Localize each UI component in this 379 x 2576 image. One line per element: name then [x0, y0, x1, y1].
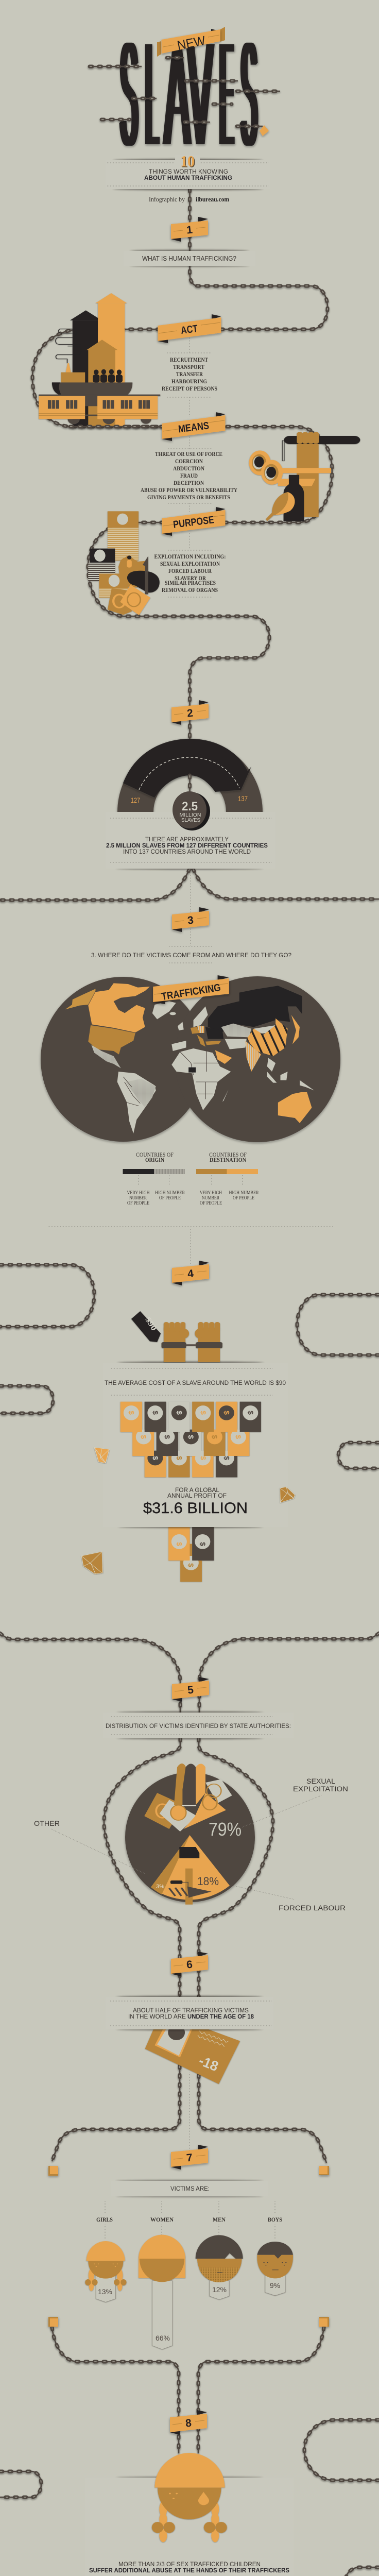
legend: countries of destination [196, 1152, 259, 1206]
dollar signs: $ [199, 1542, 207, 1546]
text: more than 2/3 [89, 2562, 289, 2574]
list: purpose: REMOVAL OF ORGANS [162, 587, 218, 594]
dollar signs: $ [175, 1542, 183, 1546]
ribbon: means [162, 412, 226, 441]
list: act: TRANSPORT [173, 364, 204, 370]
legend: countries of origin: HIGH NUMBER [155, 1191, 185, 1196]
boy [257, 2242, 293, 2278]
ribbon 4: 4 [187, 1267, 194, 1280]
percentage values [98, 2281, 280, 2342]
credit line: ilbureau.com [196, 196, 230, 203]
illustration: shackled hands with price tag: $90 [143, 1316, 158, 1332]
illustration: ship and train (act) [39, 293, 160, 427]
band: 2.5 million slaves text [106, 812, 275, 870]
text: more than 2/3: MORE THAN 2/3 OF SEX TRAFFICKED CHILDREN [118, 2562, 261, 2568]
text: about half under 18: IN THE WORLD ARE [128, 2014, 186, 2020]
legend: countries of origin: OF PEOPLE [159, 1196, 181, 1201]
illustration: crying girl [152, 2453, 227, 2542]
label: forced labour: FORCED LABOUR [279, 1904, 346, 1912]
list: purpose [154, 550, 226, 597]
list: means: FRAUD [180, 473, 198, 479]
percentage values: 9% [270, 2281, 280, 2290]
column labels: GIRLS [96, 2217, 113, 2223]
legend: countries of destination: NUMBER [202, 1196, 220, 1201]
band: sex trafficked children [85, 2477, 294, 2576]
credit line: Infographic by [149, 196, 185, 203]
percentage values: 12% [212, 2285, 227, 2294]
banknote stack [120, 1402, 261, 1567]
man [196, 2235, 243, 2282]
ribbon: act: ACT [180, 323, 198, 336]
legend: countries of destination: DESTINATION [210, 1157, 247, 1163]
percentage values: 66% [156, 2334, 170, 2342]
weight: 2.5 million slaves [173, 791, 210, 831]
legend: countries of destination: OF PEOPLE [233, 1196, 254, 1201]
title lettering: SLAVES [120, 9, 257, 179]
heading block: 10 things worth knowing [107, 152, 268, 186]
upper chain segments drawn over artwork [70, 58, 280, 2576]
list: purpose: SEXUAL EXPLOITATION [160, 561, 220, 567]
weight: 2.5 million slaves: SLAVES [181, 817, 200, 823]
dollar signs: $ [175, 1411, 183, 1415]
label: sexual exploitation: EXPLOITATION [293, 1785, 348, 1793]
ribbon 7: 7 [186, 2151, 193, 2164]
heading: distribution of victims: DISTRIBUTION OF VICTIMS IDENTIFIED BY STATE AUTHORITIES: [106, 1723, 291, 1730]
list: means [141, 449, 238, 503]
ribbon 2 [171, 700, 209, 725]
text: global profit: $31.6 BILLION [143, 1500, 248, 1517]
column labels [96, 2217, 282, 2223]
heading block: 10 things worth knowing: 10 [180, 152, 195, 170]
title lettering: SLAVES: S [120, 9, 137, 179]
pie chart: victim distribution: 18% [197, 1875, 219, 1888]
ribbon 2: 2 [186, 707, 194, 720]
list: means: COERCION [175, 459, 203, 465]
label: other [34, 1820, 145, 1874]
dollar signs: $ [187, 1563, 195, 1567]
band: what is human trafficking [124, 250, 255, 267]
legend: countries of destination: HIGH NUMBER [229, 1191, 259, 1196]
text: global profit [143, 1486, 248, 1517]
legend: countries of origin: COUNTRIES OF [136, 1152, 174, 1158]
faces chart: victims demographic [85, 2217, 293, 2349]
list: means: GIVING PAYMENTS OR BENEFITS [147, 495, 230, 501]
band: distribution of victims [103, 1711, 294, 1739]
ribbon: act [158, 314, 221, 343]
column labels: MEN [213, 2217, 226, 2223]
title lettering: SLAVES: S [241, 10, 257, 179]
legend: countries of origin: NUMBER [129, 1196, 147, 1201]
list: act: RECRUITMENT [170, 357, 208, 363]
dollar signs: $ [211, 1435, 219, 1439]
list: act: RECEIPT OF PERSONS [162, 386, 217, 392]
pie wedge: other [151, 1835, 190, 1894]
girl [85, 2241, 126, 2291]
text: about half under 18: UNDER THE AGE OF 18 [187, 2014, 254, 2020]
title lettering: SLAVES: L [146, 9, 158, 179]
label: sexual exploitation [242, 1777, 348, 1827]
ribbon 8: 8 [185, 2417, 192, 2430]
ID card under 18 [145, 2025, 240, 2084]
map countries [65, 983, 314, 1133]
list: purpose: SIMILAR PRACTISES [165, 580, 216, 586]
ribbon 6 [171, 1952, 208, 1976]
band: cost and profit [103, 1362, 288, 1528]
woman [139, 2235, 185, 2282]
column labels: WOMEN [150, 2217, 174, 2223]
text: approximately 2.5 million slaves: INTO 137 COUNTRIES AROUND THE WORLD [123, 849, 251, 855]
text: average cost: THE AVERAGE COST OF A SLAVE AROUND THE WORLD IS $90 [105, 1380, 286, 1386]
ribbon: trafficking [153, 975, 229, 1004]
title lettering: SLAVES: A [164, 10, 190, 179]
percentage values: 13% [98, 2287, 112, 2296]
ribbon 1: 1 [186, 224, 193, 236]
list: means: THREAT OR USE OF FORCE [155, 451, 222, 457]
dollar signs: $ [247, 1411, 255, 1415]
dollar signs: $ [199, 1456, 208, 1460]
dollar signs: $ [222, 1411, 231, 1415]
dollar signs: $ [187, 1435, 195, 1439]
text: about half under 18 [128, 2008, 254, 2020]
text: about half under 18: ABOUT HALF OF TRAFFICKING VICTIMS [133, 2008, 249, 2014]
illustration: baton, eyes, bottle (means) [249, 432, 360, 521]
legend: countries of origin: VERY HIGH [127, 1191, 150, 1196]
heading: victims are: VICTIMS ARE: [170, 2186, 210, 2192]
pie chart: victim distribution: 3% [156, 1884, 164, 1890]
list: means: ABDUCTION [173, 466, 205, 472]
title lettering: SLAVES: V [188, 10, 213, 179]
dollar signs: $ [175, 1456, 183, 1460]
pie chart: victim distribution [125, 1764, 255, 1905]
legend: countries of destination: OF PEOPLE [200, 1201, 222, 1206]
heading block: 10 things worth knowing: 10 [181, 152, 196, 171]
ribbon 3: 3 [187, 914, 194, 927]
title ribbon: NEW [157, 27, 225, 57]
band: about half under 18 [106, 1996, 273, 2030]
dollar signs: $ [163, 1435, 171, 1439]
dollar signs: $ [234, 1435, 243, 1439]
heading: where do the victims come from: 3. WHERE DO THE VICTIMS COME FROM AND WHERE DO THEY GO? [91, 952, 291, 959]
padlocks [48, 2166, 329, 2327]
ribbon 3 [172, 907, 209, 932]
label: forced labour [233, 1886, 346, 1912]
legend: countries of destination: COUNTRIES OF [209, 1152, 247, 1158]
weight: 2.5 million slaves: 2.5 [182, 800, 198, 814]
text: approximately 2.5 million slaves: THERE ARE APPROXIMATELY [145, 837, 229, 843]
ID card under 18: -18 [197, 2053, 220, 2074]
dollar signs [128, 1411, 255, 1567]
pie chart: victim distribution: 79% [209, 1819, 242, 1840]
ribbon: trafficking: TRAFFICKING [161, 982, 221, 1003]
dollar signs: $ [140, 1435, 148, 1439]
ribbon 1 [171, 217, 208, 242]
ribbon: purpose [162, 507, 226, 536]
ribbon 7 [171, 2145, 208, 2170]
weight: 2.5 million slaves: MILLION [179, 812, 201, 818]
dollar signs: $ [222, 1456, 231, 1460]
band: 10 things [106, 159, 270, 191]
legend: countries of origin [123, 1152, 185, 1206]
pie wedge: forced labour [151, 1835, 230, 1900]
label: sexual exploitation: SEXUAL [306, 1777, 336, 1785]
credit line [149, 196, 230, 203]
world map: two hemispheres [41, 976, 340, 1142]
chart: road arch from 127 to 137 countries [117, 739, 263, 812]
heading: what is human trafficking: WHAT IS HUMAN TRAFFICKING? [142, 255, 236, 262]
heading block: 10 things worth knowing: THINGS WORTH KNOWING [149, 169, 228, 175]
dollar signs: $ [151, 1411, 160, 1415]
list: act [162, 353, 217, 397]
text: more than 2/3: SUFFER ADDITIONAL ABUSE AT THE HANDS OF THEIR TRAFFICKERS [89, 2568, 289, 2574]
legend: countries of destination: VERY HIGH [200, 1191, 222, 1196]
column labels: BOYS [268, 2217, 282, 2223]
icon: padlock on title chain [260, 125, 269, 136]
title lettering: SLAVES: E [220, 10, 233, 179]
illustration: shackled hands with price tag [131, 1311, 222, 1362]
dollar signs: $ [128, 1411, 136, 1415]
notes below profit band [168, 1527, 214, 1582]
pie illustrations [144, 1764, 232, 1832]
list: purpose: SLAVERY OR [175, 575, 206, 582]
band: victims are [111, 2180, 268, 2197]
dollar signs: $ [199, 1411, 208, 1415]
legend: countries of origin: ORIGIN [145, 1157, 165, 1163]
text: global profit: FOR A GLOBAL [175, 1486, 219, 1494]
dollar signs: $ [151, 1456, 160, 1460]
tags [96, 2276, 285, 2349]
chart: road arch from 127 to 137 countries: 137 [238, 794, 248, 803]
text: global profit: ANNUAL PROFIT OF [167, 1492, 227, 1499]
ribbon: purpose: PURPOSE [173, 514, 215, 531]
column dashed lines [105, 2201, 275, 2240]
list: means: ABUSE OF POWER OR VULNERABILITY [141, 487, 238, 494]
title ribbon: NEW: NEW [176, 33, 207, 53]
ribbon: means: MEANS [178, 420, 210, 435]
ribbon 5: 5 [187, 1684, 194, 1697]
heading block: 10 things worth knowing: ABOUT HUMAN TRAFFICKING [144, 175, 232, 181]
chart: road arch from 127 to 137 countries: 127 [131, 796, 140, 804]
ribbon 8 [170, 2410, 207, 2435]
icons: gems [81, 1447, 295, 1574]
ribbon 4 [172, 1261, 209, 1285]
text: approximately 2.5 million slaves: 2.5 MILLION SLAVES FROM 127 DIFFERENT COUNTRIES [106, 843, 268, 849]
legend: countries of origin: OF PEOPLE [127, 1201, 149, 1206]
label: other: OTHER [34, 1820, 60, 1827]
illustration: banknotes, bust, condoms (purpose) [88, 511, 160, 615]
list: purpose: FORCED LABOUR [168, 568, 212, 574]
text: approximately 2.5 million slaves [106, 837, 268, 855]
list: act: HARBOURING [171, 379, 207, 385]
list: act: TRANSFER [176, 371, 203, 378]
list: purpose: EXPLOITATION INCLUDING: [154, 554, 226, 560]
ribbon 6: 6 [186, 1958, 193, 1971]
ribbon 5 [172, 1677, 209, 1702]
dashed connectors [190, 337, 191, 2576]
list: means: DECEPTION [174, 480, 204, 486]
